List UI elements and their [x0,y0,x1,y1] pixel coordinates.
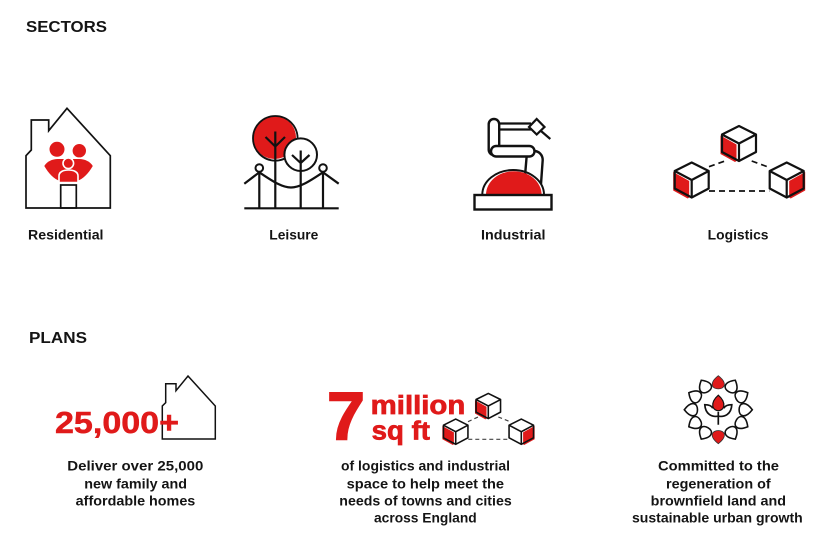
plan: 25,000+ homes graphic: 25,000+ [55,406,179,440]
text: deliver homes: Deliver over 25,000 [67,459,203,474]
text: committed to regeneration: sustainable urban growth [632,511,803,526]
heading: sectors: SECTORS [26,19,107,36]
label: leisure: Leisure [269,227,319,242]
heading: plans: PLANS [29,330,87,347]
plan: 7 million sq ft graphic: 7 [327,378,365,454]
plan: regeneration flower icon [684,376,752,444]
icon: residential house with family [26,108,110,208]
icon: industrial robot arm [474,119,552,210]
plan: 7 million sq ft graphic: million [371,392,465,420]
label: logistics: Logistics [708,227,768,242]
text: committed to regeneration: regeneration of [666,476,771,491]
text: logistics and industrial space [339,459,512,526]
icon: leisure trees and rope [244,116,339,208]
label: industrial: Industrial [481,227,546,242]
text: logistics and industrial space: needs of towns and cities [339,493,512,508]
text: logistics and industrial space: of logistics and industrial [341,459,510,474]
label: residential: Residential [28,227,104,242]
text: deliver homes [67,459,203,508]
plan: 7 million sq ft graphic [327,378,535,454]
text: committed to regeneration: Committed to the [658,459,780,474]
text: logistics and industrial space: across England [374,511,477,526]
plan: 7 million sq ft graphic: sq ft [372,417,431,445]
text: committed to regeneration [632,459,803,526]
icon: logistics cubes network [673,126,805,198]
text: logistics and industrial space: space to help meet the [347,476,505,491]
text: deliver homes: new family and [84,476,187,491]
plan: 25,000+ homes graphic [55,376,215,440]
text: deliver homes: affordable homes [76,493,195,508]
text: committed to regeneration: brownfield land and [651,493,786,508]
